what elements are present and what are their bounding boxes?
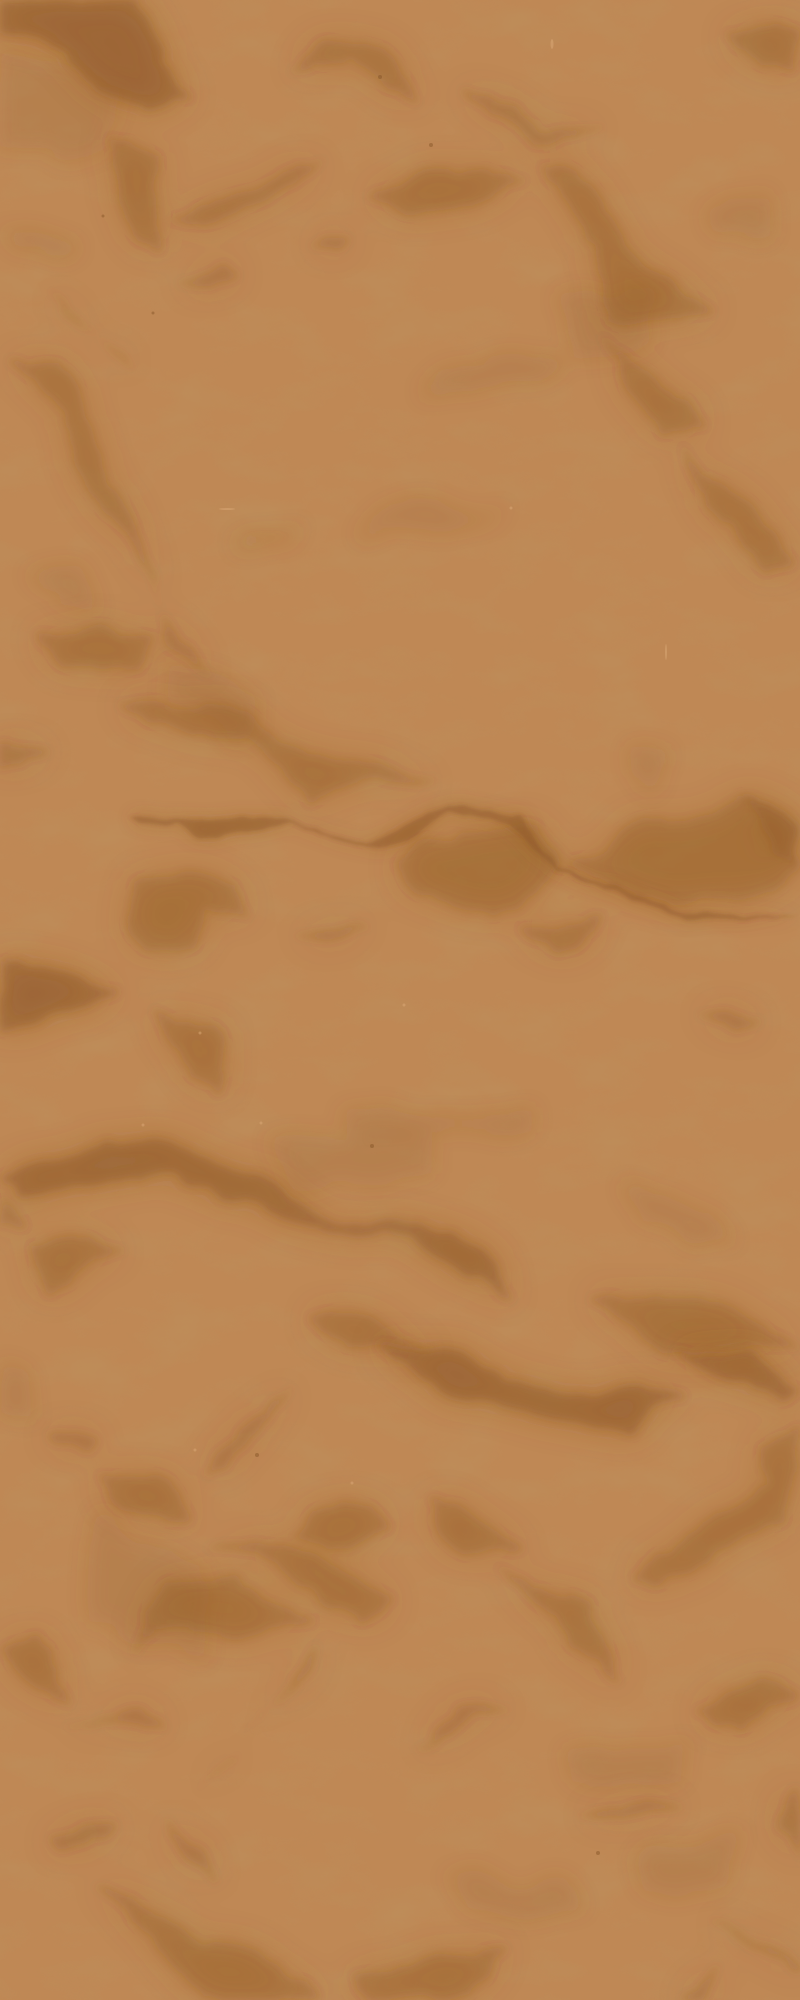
crease shadows: top section — [0, 0, 800, 683]
crease shadows: middle section — [0, 700, 800, 1351]
sharp fold line across the middle — [128, 804, 800, 920]
paper specks — [102, 39, 667, 1855]
crease shadows: bottom section — [0, 1350, 800, 2000]
